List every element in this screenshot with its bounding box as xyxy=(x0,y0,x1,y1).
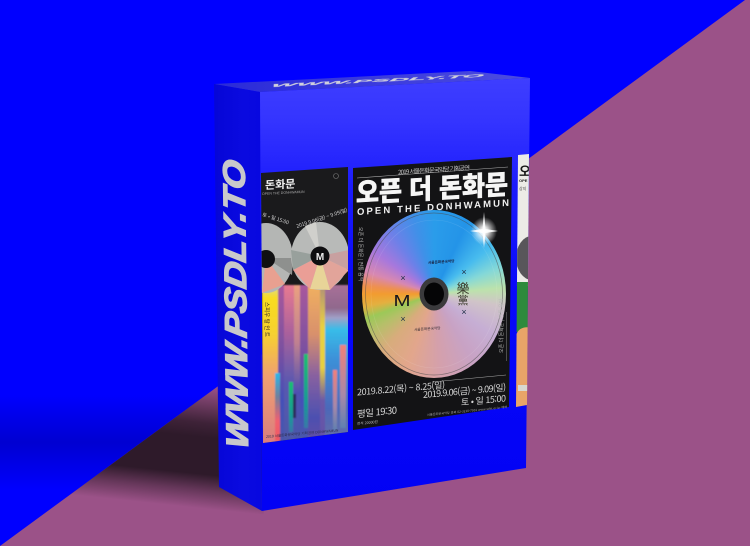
box shadow on the blue wall xyxy=(0,404,193,482)
box top face text: WWW.PSDLY.TO xyxy=(271,73,485,88)
product box xyxy=(214,71,530,511)
box shadow on the floor xyxy=(74,390,264,512)
ticket price: 전석 20000원 xyxy=(357,419,378,427)
disc rainbow surface xyxy=(362,210,506,378)
poster left vertical caption: 오픈 더 돈화문 | 전통 음악 xyxy=(357,227,364,282)
box top face xyxy=(214,71,530,92)
poster tan band xyxy=(516,327,528,407)
poster subheading: OPEN THE DONHWAMUN xyxy=(262,190,305,196)
disc xyxy=(362,210,506,378)
poster background xyxy=(353,157,512,430)
disc cross marks xyxy=(400,267,467,324)
time line weekend: 토 • 일 15:00 xyxy=(461,391,506,408)
disc bottom label: 서울돈화문국악당 xyxy=(414,325,441,333)
poster title fragment: 오 xyxy=(519,161,531,180)
disc groove rings xyxy=(366,213,502,375)
disc hanja mark: 樂 xyxy=(456,278,470,297)
disc: 黨 xyxy=(458,292,468,308)
poster white upper xyxy=(516,154,529,286)
disc cross marks: × xyxy=(461,267,467,277)
poster green band xyxy=(516,282,528,332)
poster english subtitle: OPEN THE DONHWAMUN xyxy=(357,198,509,218)
right grey disc: M xyxy=(316,252,324,263)
poster right vertical caption: 오픈 더 돈화문 | 전통 음악 xyxy=(498,298,505,353)
poster bottom caption: 2019 서울돈화문국악당 기획공연 DONHWAMUN xyxy=(266,427,339,440)
disc cross marks: × xyxy=(461,307,467,317)
box front face xyxy=(260,78,530,511)
poster date right: 2019.9.06(금) ~ 9.09(일) xyxy=(295,207,349,230)
poster grey disc xyxy=(517,236,528,280)
poster logo mark xyxy=(334,174,338,178)
time line weekday: 평일 19:30 xyxy=(357,403,397,420)
poster background xyxy=(261,167,348,443)
disc M logo: M xyxy=(394,293,410,310)
panel: right poster xyxy=(516,154,529,407)
right grey disc xyxy=(291,222,349,290)
box left face xyxy=(214,84,262,511)
poster top rule xyxy=(357,167,508,178)
date line two: 2019.9.06(금) ~ 9.09(일) xyxy=(423,381,506,401)
disc cross marks: × xyxy=(400,273,406,283)
left grey disc xyxy=(261,223,292,293)
gradient stripes xyxy=(262,285,349,450)
poster date rule xyxy=(432,375,506,382)
panel: left poster xyxy=(261,167,348,443)
disc cross marks: × xyxy=(400,314,406,324)
disc flare xyxy=(470,212,498,248)
disc top label: 서울돈화문국악당 xyxy=(428,258,455,266)
poster caption fragment: 상지 xyxy=(519,185,527,192)
poster title: 오픈 더 돈화문 xyxy=(356,163,508,210)
poster heading: 돈화문 xyxy=(265,175,295,193)
disc hub xyxy=(420,278,448,310)
poster right vertical rule xyxy=(506,312,508,361)
poster vertical caption: 스피우 탈 인 트 xyxy=(263,302,271,337)
spine text: WWW.PSDLY.TO xyxy=(217,157,255,451)
poster subtitle fragment: OPE xyxy=(519,178,528,183)
poster small book icon xyxy=(518,385,528,391)
poster date left: 토 • 일 15:00 xyxy=(261,211,290,226)
panel: center poster xyxy=(353,157,512,430)
date line one: 2019.8.22(목) ~ 8.25(일) xyxy=(357,378,445,398)
poster top caption: 2019 서울돈화문국악당 기획공연 xyxy=(398,163,470,176)
bottom organisers: 서울돈화문국악당 문의 02-3210-7001 www.sdtt.or.kr 예매 xyxy=(427,404,507,417)
